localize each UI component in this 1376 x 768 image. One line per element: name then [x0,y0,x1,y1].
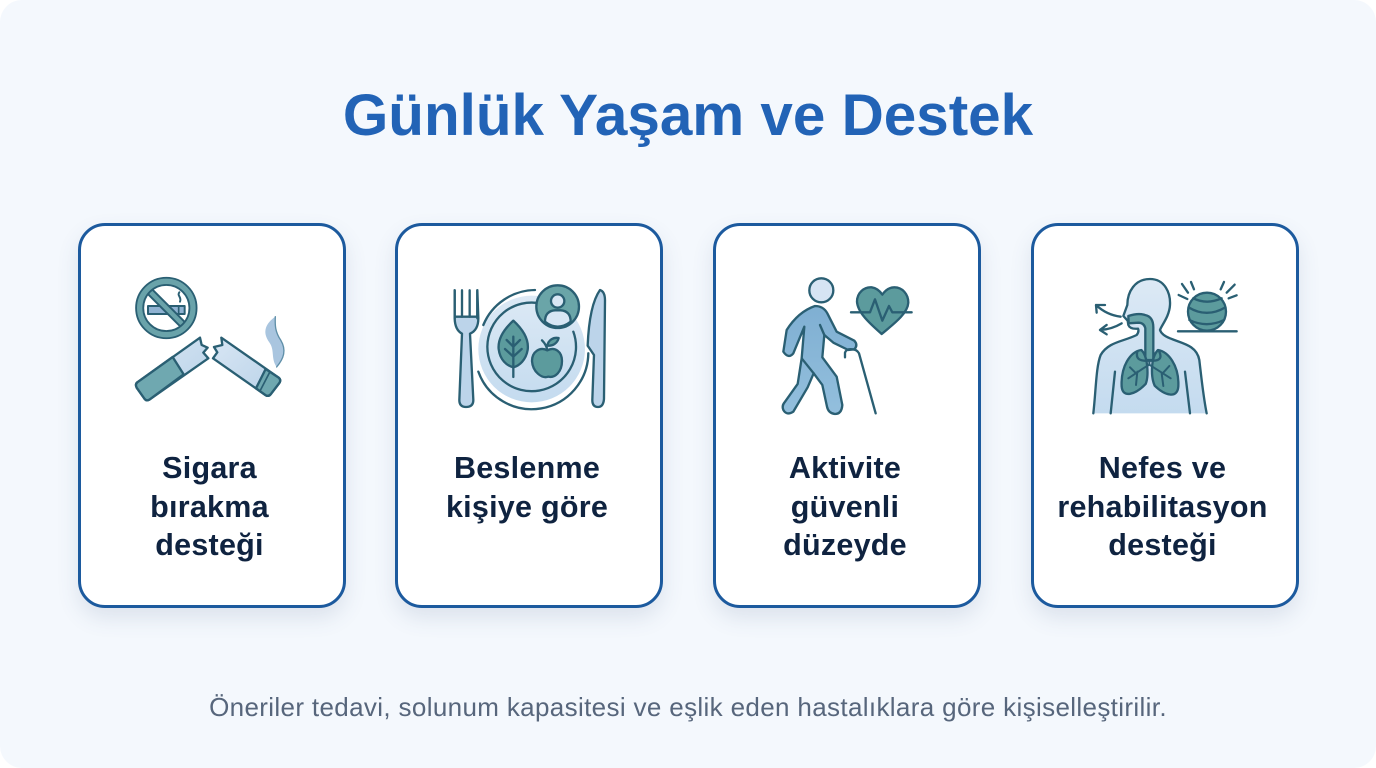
icon: broken cigarette and no smoking sign [136,281,284,400]
body [783,306,856,414]
label: breathing and rehabilitation [1057,451,1268,562]
torso silhouette [1093,279,1207,413]
label: nutrition: kişiye göre [446,490,608,524]
label: smoking cessation: Sigara [162,451,257,485]
label: activity: Aktivite [789,451,901,485]
card: activity [713,223,981,608]
card: nutrition [395,223,663,608]
label: breathing and rehabilitation: rehabilitasyon [1057,490,1268,524]
right cigarette [213,338,280,396]
cane [845,349,876,413]
label: activity: güvenli [791,490,899,524]
title: Günlük Yaşam ve Destek [343,83,1033,148]
label: activity [783,451,907,562]
card: smoking cessation [78,223,346,608]
label: smoking cessation: bırakma [150,490,269,524]
icon: lungs, airway and exercise ball [1093,279,1237,413]
airway [1128,314,1153,360]
label: activity: düzeyde [783,528,907,562]
footer note: Öneriler tedavi, solunum kapasitesi ve eşlik eden hastalıklara göre kişiselleştirilir. [209,692,1167,722]
torso detail [802,325,824,373]
fork [455,290,478,407]
plate [478,290,588,409]
left cigarette [136,338,208,400]
heart [851,287,912,334]
card: breathing and rehabilitation [1030,223,1298,608]
person badge [536,285,579,328]
label: breathing and rehabilitation: Nefes ve [1099,451,1226,485]
head [809,278,833,302]
smoke [265,317,284,367]
label: smoking cessation: desteği [155,528,264,562]
icon: plate with fork and knife [455,285,605,409]
label: breathing and rehabilitation: desteği [1108,528,1217,562]
knife [588,290,605,407]
no smoking sign [140,281,193,335]
icon: person walking with cane and heart [783,278,912,414]
exercise ball [1178,282,1237,331]
label: nutrition [446,451,608,524]
leaf [499,321,528,377]
label: nutrition: Beslenme [454,451,600,485]
label: smoking cessation [150,451,269,562]
arm lines [1111,372,1190,413]
apple [532,338,562,377]
lungs [1122,350,1178,395]
exhaled air arrows [1096,305,1122,334]
